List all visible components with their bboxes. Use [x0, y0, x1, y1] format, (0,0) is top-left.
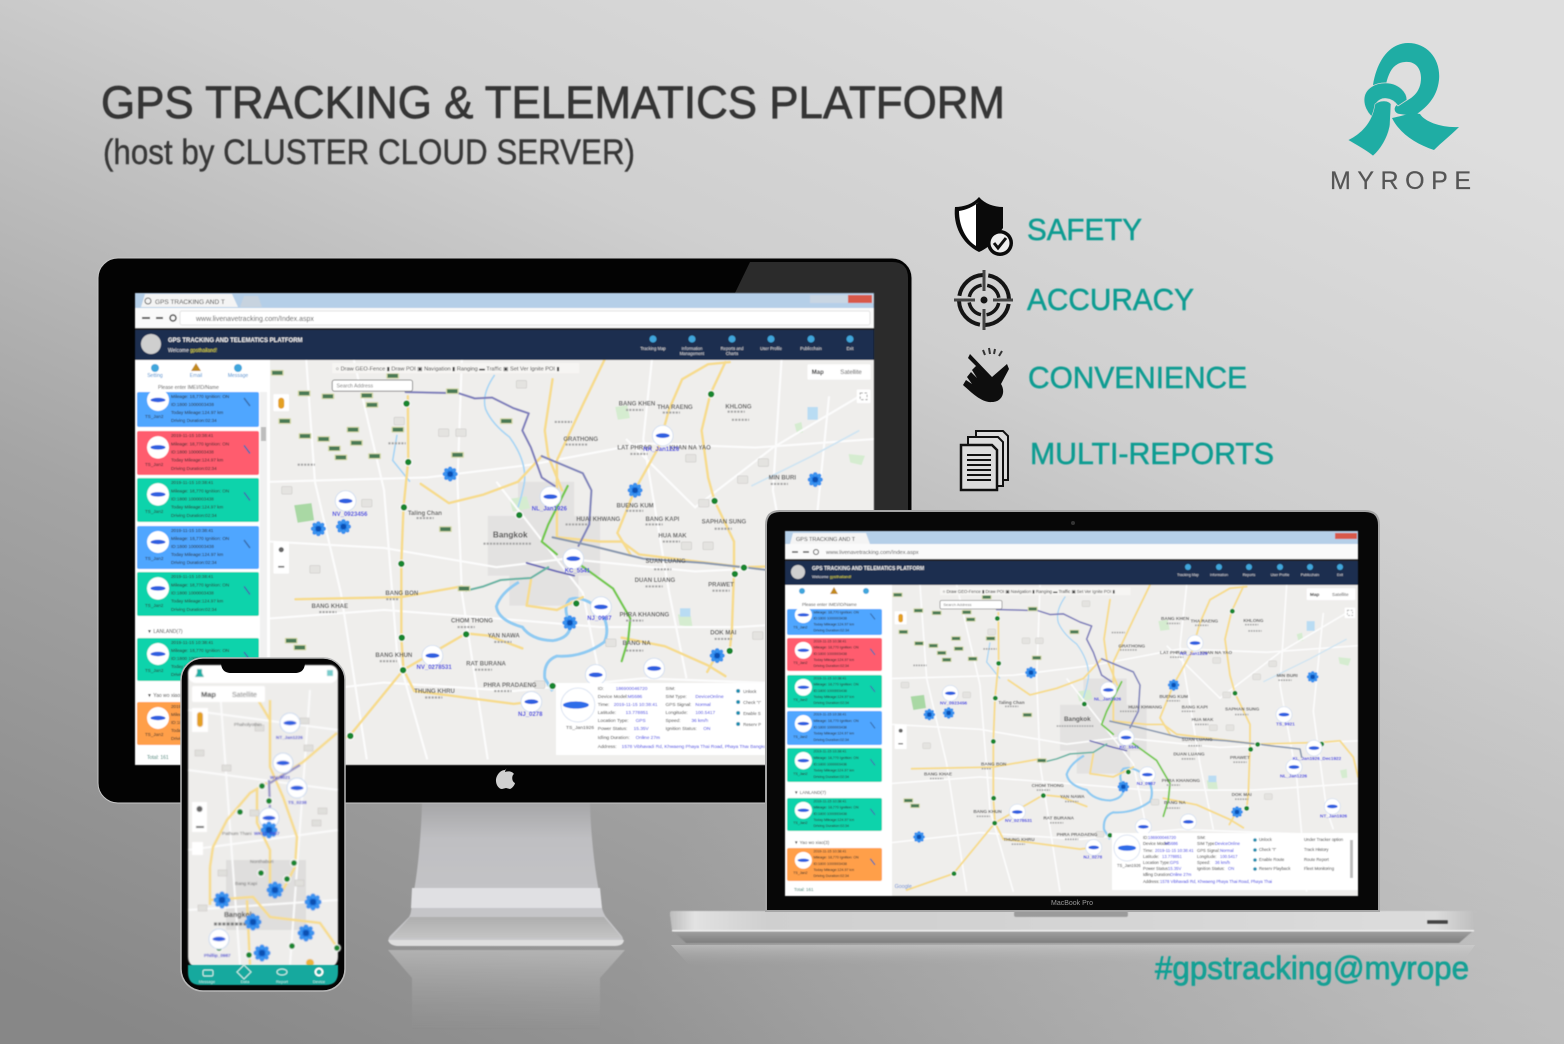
laptop vehicle info popup: TS_Jan1926: [1117, 863, 1141, 868]
phone body: [181, 658, 345, 991]
laptop sidebar: Total: 161: [794, 887, 814, 892]
phone screen: Nonthaburi: [250, 859, 273, 865]
app header: Management: [680, 351, 705, 356]
laptop vehicle info popup: GPS: [1170, 860, 1179, 865]
icon: multi-reports documents: [961, 431, 1008, 490]
laptop vehicle info popup: Longitude:: [1197, 854, 1217, 859]
sidebar: Email: [190, 373, 202, 379]
laptop vehicle info popup: 2019-11-15 10:38:41: [1155, 848, 1194, 853]
sidebar: [135, 360, 270, 765]
laptop sidebar: Please enter IMEI/ID/Name: [802, 602, 857, 607]
app header: Reports and: [721, 346, 744, 351]
laptop vehicle info popup: Address:: [1143, 879, 1160, 884]
icon: convenience snapping hand: [963, 348, 1009, 402]
laptop vehicle info popup: Enable Route: [1259, 857, 1285, 862]
laptop browser chrome: www.livenavetracking.com/Index.aspx: [825, 550, 919, 556]
app header: User Profile: [760, 346, 783, 351]
sidebar: Total: 161: [147, 755, 169, 761]
laptop browser chrome: [785, 531, 1358, 561]
sidebar: Please enter IMEI/ID/Name: [158, 385, 219, 391]
laptop app header: Tracking Map: [1177, 573, 1199, 577]
phone screen: Phaholyothin: [234, 722, 262, 728]
phone bottom nav: [188, 965, 338, 985]
laptop: MacBook Pro: [1051, 900, 1093, 907]
laptop vehicle info popup: Normal: [1220, 848, 1234, 853]
label: convenience: CONVENIENCE: [1028, 360, 1247, 395]
phone bottom nav: Device: [313, 979, 326, 984]
phone screen: Satellite: [232, 692, 257, 699]
laptop vehicle info popup: Fleet Monitoring: [1304, 866, 1335, 871]
sidebar: Setting: [147, 373, 163, 379]
laptop vehicle info popup: Power Status:: [1143, 866, 1169, 871]
browser chrome: www.livenavetracking.com/Index.aspx: [195, 316, 314, 323]
laptop base: [670, 911, 1476, 943]
laptop lid: [766, 511, 1379, 911]
title: GPS TRACKING & TELEMATICS PLATFORM: [101, 77, 1005, 128]
laptop vehicle info popup: Latitude:: [1143, 854, 1159, 859]
app header: Exit: [847, 346, 854, 351]
app header: Tracking Map: [640, 346, 666, 351]
laptop vehicle info popup: Route Report: [1304, 857, 1330, 862]
phone bottom nav: Report: [276, 979, 289, 984]
sidebar: Message: [228, 373, 248, 379]
phone notch: [221, 662, 305, 673]
laptop app header: Publicchain: [1301, 573, 1319, 577]
laptop app header: Information: [1210, 573, 1228, 577]
laptop app header: User Profile: [1271, 573, 1289, 577]
laptop sidebar: [785, 585, 892, 896]
laptop vehicle info popup: Unlock: [1259, 837, 1273, 842]
app header: Information: [682, 346, 703, 351]
laptop reflection: [671, 945, 1475, 966]
map: [270, 360, 874, 765]
app header: GPS TRACKING AND TELEMATICS PLATFORM: [168, 338, 303, 344]
sidebar: ▼ LANLAND(7): [147, 629, 183, 635]
phone screen: NT_Jan1226: [276, 735, 303, 740]
phone screen: Bang Kapi: [235, 881, 257, 887]
icon: accuracy target: [954, 270, 1013, 330]
laptop map: [892, 585, 1358, 896]
laptop vehicle info popup: 15.35V: [1168, 866, 1181, 871]
laptop vehicle info popup: SIM Type:: [1197, 841, 1216, 846]
laptop app header: Welcome gpsthailand!: [812, 574, 851, 579]
laptop vehicle info popup: DeviceOnline: [1215, 841, 1241, 846]
monitor stand: [388, 803, 625, 1030]
browser chrome: [135, 293, 874, 330]
label: accuracy: ACCURACY: [1027, 282, 1194, 317]
logo wordmark: MYROPE: [1330, 167, 1471, 195]
laptop vehicle info popup: Online 27m: [1170, 872, 1192, 877]
laptop: [670, 511, 1476, 966]
desktop monitor: [98, 258, 912, 1030]
icon: safety shield: [955, 197, 1013, 256]
smartphone: [181, 658, 345, 991]
laptop vehicle info popup: Check "I": [1259, 847, 1277, 852]
laptop sidebar: ▼ LANLAND(7): [794, 790, 826, 795]
laptop vehicle info popup: 186900046720: [1148, 835, 1177, 840]
subtitle: (host by CLUSTER CLOUD SERVER): [103, 133, 635, 172]
sidebar: ▼ Yao wo xiao(3): [147, 693, 187, 699]
phone screen: WV_9021: [270, 775, 291, 780]
label: safety: SAFETY: [1027, 212, 1142, 247]
vehicle info popup: [556, 683, 769, 755]
monitor bezel: [98, 258, 912, 803]
app header: Welcome gpsthailand!: [168, 348, 217, 354]
app header: Publicchain: [800, 346, 822, 351]
laptop vehicle info popup: ON: [1228, 866, 1234, 871]
laptop vehicle info popup: 36 km/h: [1215, 860, 1231, 865]
phone bottom nav: Data: [241, 979, 250, 984]
phone screen: Phillip_0987: [204, 953, 231, 958]
monitor screen: [135, 293, 874, 765]
laptop vehicle info popup: Time:: [1143, 848, 1153, 853]
laptop app header: GPS TRACKING AND TELEMATICS PLATFORM: [812, 566, 924, 572]
laptop vehicle info popup: Location Type:: [1143, 860, 1170, 865]
laptop vehicle info popup: GPS Signal:: [1197, 848, 1220, 853]
laptop vehicle info popup: Idling Duration:: [1143, 872, 1171, 877]
laptop vehicle info popup: 13.778851: [1162, 854, 1182, 859]
hashtag: #gpstracking@myrope: [1155, 950, 1469, 986]
phone screen: WK02_0987: [254, 831, 280, 836]
phone screen: Pathum Thani: [222, 831, 252, 837]
phone screen: [188, 665, 341, 969]
laptop screen: [785, 531, 1358, 896]
logo: MYROPE: [1330, 43, 1471, 195]
laptop vehicle info popup: Device Model:: [1143, 841, 1170, 846]
laptop vehicle info popup: Under Tracker option: [1304, 837, 1344, 842]
laptop app header: [785, 561, 1358, 585]
laptop vehicle info popup: Reserv Playback: [1259, 866, 1291, 871]
laptop vehicle info popup: 1578 Vibhavadi Rd, Khwaeng Phaya Thai Road, Phaya Thai: [1160, 879, 1272, 884]
phone bottom nav: Message: [199, 979, 216, 984]
app header: Charts: [726, 351, 738, 356]
phone screen: Map: [201, 690, 216, 699]
laptop app header: Exit: [1337, 573, 1343, 577]
phone screen: Bangkok: [224, 912, 254, 919]
laptop browser chrome: GPS TRACKING AND T: [796, 537, 856, 543]
laptop vehicle info popup: SIM:: [1197, 835, 1206, 840]
laptop vehicle info popup: [1112, 833, 1358, 890]
laptop vehicle info popup: Ignition Status:: [1197, 866, 1225, 871]
laptop vehicle info popup: Track History: [1304, 847, 1329, 852]
phone screen: TS_0238: [288, 800, 307, 805]
browser chrome: GPS TRACKING AND T: [155, 299, 225, 306]
app header: [135, 330, 874, 360]
label: multi-reports: MULTI-REPORTS: [1030, 436, 1274, 471]
laptop vehicle info popup: ID:: [1143, 835, 1148, 840]
laptop vehicle info popup: M5686: [1165, 841, 1178, 846]
laptop sidebar: ▼ Yao wo xiao(3): [794, 840, 830, 845]
laptop vehicle info popup: 100.5417: [1220, 854, 1238, 859]
laptop app header: Reports: [1243, 573, 1255, 577]
laptop vehicle info popup: Speed:: [1197, 860, 1210, 865]
